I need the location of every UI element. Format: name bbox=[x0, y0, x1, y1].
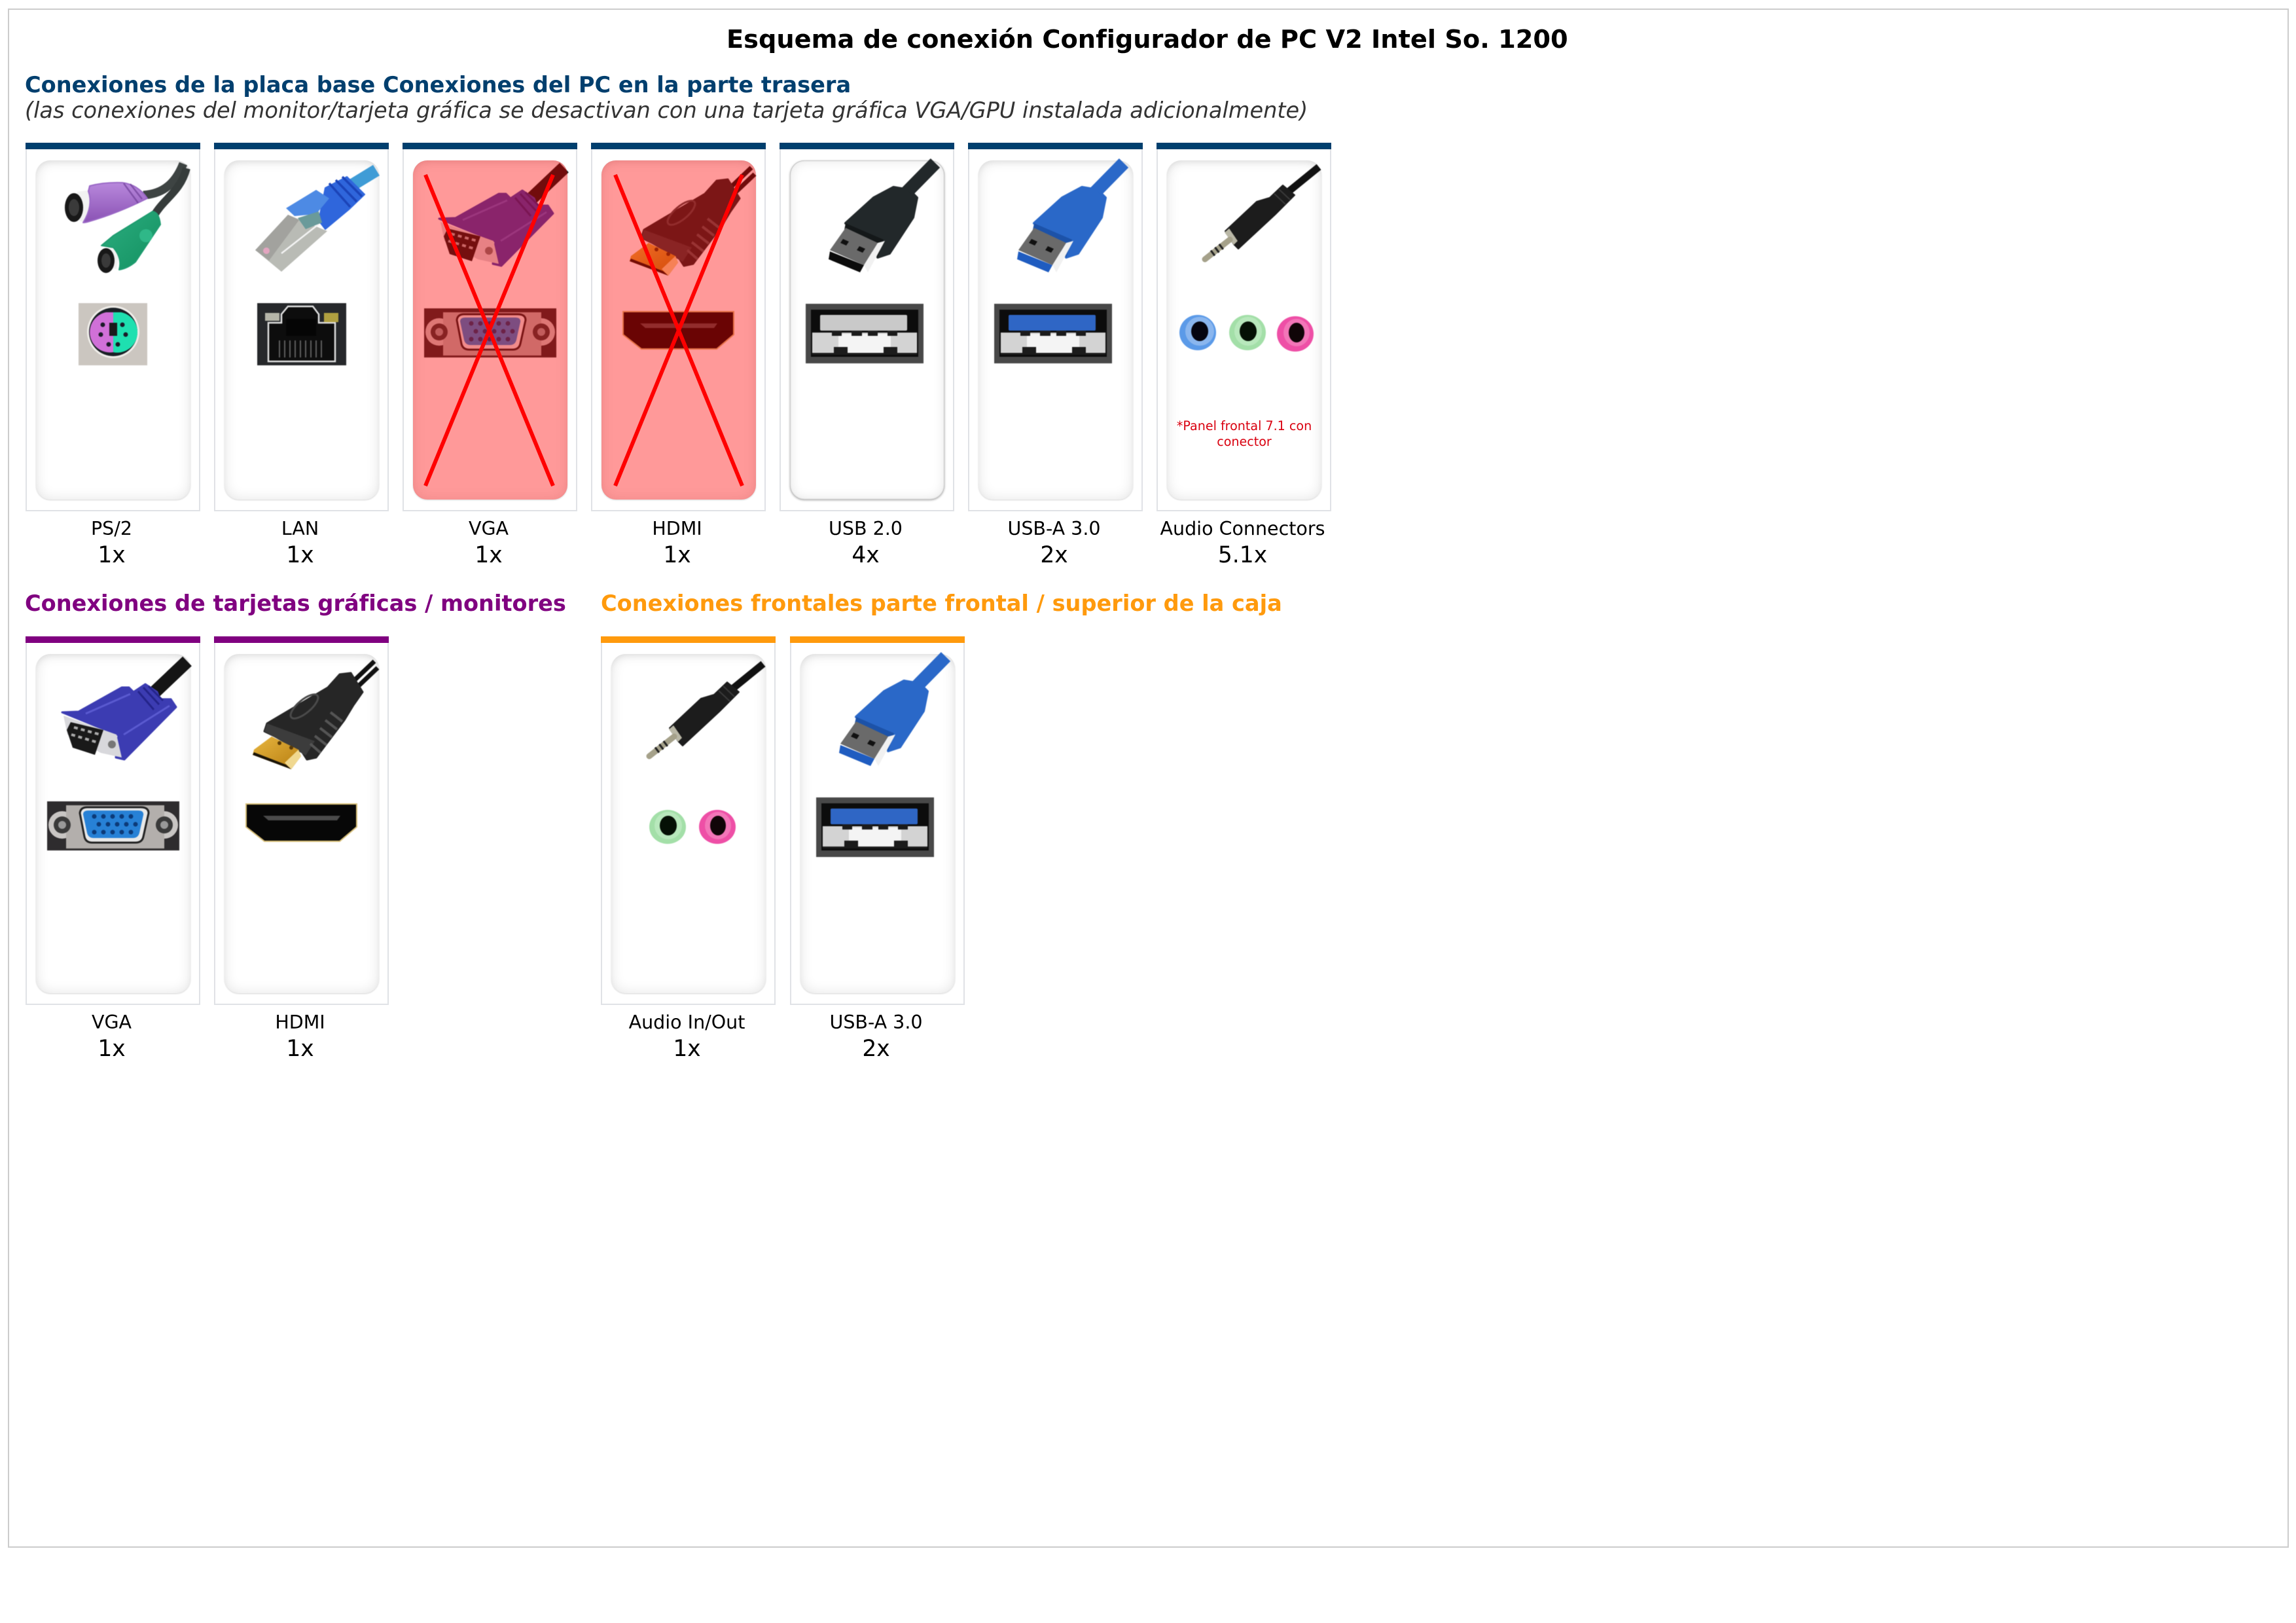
panel: GPU HDMI: HDMI bbox=[275, 1012, 325, 1033]
note text: *Panel frontal 7.1 con bbox=[1177, 418, 1312, 433]
panel: USB 2.0: USB 2.0 bbox=[829, 518, 903, 539]
panel: PS/2: PS/2 bbox=[91, 518, 132, 539]
icon: HDMI plug bbox=[253, 661, 378, 769]
panel: GPU VGA bbox=[26, 636, 200, 1062]
panel: LAN: LAN bbox=[281, 518, 319, 539]
connector art: HDMI crossed out bbox=[601, 160, 757, 500]
connector art: USB-A 3.0 bbox=[994, 158, 1128, 364]
note text: conector bbox=[1217, 434, 1272, 449]
panel: GPU VGA: 1x bbox=[98, 1036, 126, 1062]
icon: red cross bbox=[425, 175, 553, 486]
icon: USB plug blue bbox=[839, 657, 946, 766]
icon: red cross bbox=[615, 175, 742, 486]
panel: Front USB-A 3.0: 2x bbox=[862, 1036, 890, 1062]
panel: LAN bbox=[214, 143, 389, 568]
connector art: USB 2.0 bbox=[805, 158, 941, 364]
panel: GPU VGA: VGA bbox=[92, 1012, 132, 1033]
panel: VGA (disabled): VGA bbox=[469, 518, 509, 539]
icon: PS/2 port bbox=[79, 303, 147, 365]
panel: USB-A 3.0 bbox=[968, 143, 1143, 568]
icon: USB 2.0 port bbox=[806, 304, 924, 363]
panel: VGA (disabled) bbox=[403, 143, 577, 568]
connector art: HDMI bbox=[245, 659, 380, 843]
panel: USB 2.0 bbox=[780, 143, 954, 568]
panel: HDMI (disabled): HDMI bbox=[652, 518, 702, 539]
panel: LAN: 1x bbox=[286, 542, 314, 568]
icon: RJ45 port bbox=[257, 303, 346, 365]
connector art: VGA crossed out bbox=[413, 160, 569, 500]
icon: audio ports bbox=[649, 810, 736, 844]
icon: audio jack plug bbox=[649, 664, 763, 756]
icon: audio ports bbox=[1179, 315, 1314, 352]
panel: Audio Connectors bbox=[1157, 143, 1331, 568]
panel: Audio In/Out: Audio In/Out bbox=[629, 1012, 745, 1033]
icon: HDMI port bbox=[623, 312, 734, 349]
heading: motherboard connections: Conexiones de la placa base Conexiones del PC en la parte trasera bbox=[25, 72, 851, 98]
panel: Audio In/Out bbox=[601, 636, 776, 1062]
icon: VGA plug bbox=[62, 661, 187, 759]
panel: Audio In/Out: 1x bbox=[673, 1036, 701, 1062]
connector art: LAN bbox=[255, 165, 380, 366]
title: Esquema de conexión Configurador de PC V2 Intel So. 1200 bbox=[726, 25, 1568, 54]
panel: USB 2.0: 4x bbox=[852, 542, 880, 568]
icon: USB plug black bbox=[829, 163, 935, 272]
icon: RJ45 plug bbox=[255, 170, 376, 272]
image tile: USB-A 3.0 bbox=[800, 654, 955, 993]
image tile: USB-A 3.0 bbox=[978, 160, 1133, 500]
icon: VGA plug bbox=[439, 168, 564, 266]
icon: HDMI plug bbox=[630, 168, 755, 276]
panel: USB-A 3.0: USB-A 3.0 bbox=[1007, 518, 1101, 539]
connector art: Audio bbox=[1177, 164, 1321, 449]
image tile: HDMI bbox=[224, 654, 379, 993]
subheading note: (las conexiones del monitor/tarjeta gráfica se desactivan con una tarjeta gráfica VGA/GPU instalada adicionalmente) bbox=[25, 98, 1308, 123]
icon: USB plug blue bbox=[1017, 163, 1124, 272]
image tile: USB 2.0 bbox=[790, 160, 944, 500]
icon: audio jack plug bbox=[1205, 167, 1319, 259]
red disabled overlay bbox=[413, 160, 567, 500]
image tile: VGA bbox=[413, 160, 567, 500]
connector art: VGA bbox=[46, 656, 192, 851]
image tile: PS/2 bbox=[36, 160, 190, 500]
panel: HDMI (disabled) bbox=[591, 143, 766, 568]
panel: PS/2 bbox=[26, 143, 200, 568]
icon: USB 3.0 port bbox=[994, 304, 1112, 363]
heading: graphics card connections: Conexiones de tarjetas gráficas / monitores bbox=[25, 591, 566, 616]
icon: HDMI port bbox=[246, 804, 357, 841]
icon: USB 3.0 port bbox=[816, 797, 934, 857]
note text bbox=[1177, 418, 1312, 449]
icon: VGA port bbox=[424, 308, 556, 357]
image tile: HDMI bbox=[601, 160, 756, 500]
connector art: USB-A 3.0 bbox=[816, 652, 951, 858]
panel: Front USB-A 3.0 bbox=[790, 636, 965, 1062]
image tile: Audio bbox=[1167, 160, 1321, 500]
panel: Audio Connectors: Audio Connectors bbox=[1160, 518, 1325, 539]
heading: front panel connections: Conexiones frontales parte frontal / superior de la caja bbox=[601, 591, 1282, 616]
icon: VGA port bbox=[47, 801, 179, 850]
panel: GPU HDMI bbox=[214, 636, 389, 1062]
panel: VGA (disabled): 1x bbox=[475, 542, 503, 568]
red disabled overlay bbox=[601, 160, 756, 500]
image tile: VGA bbox=[36, 654, 190, 993]
panel: Audio Connectors: 5.1x bbox=[1218, 542, 1267, 568]
panel: USB-A 3.0: 2x bbox=[1040, 542, 1068, 568]
connector art: PS/2 bbox=[64, 162, 191, 365]
connector art: Audio bbox=[645, 661, 766, 845]
image tile: LAN bbox=[224, 160, 379, 500]
panel: PS/2: 1x bbox=[98, 542, 126, 568]
icon: PS/2 plugs bbox=[65, 164, 187, 273]
panel: Front USB-A 3.0: USB-A 3.0 bbox=[829, 1012, 923, 1033]
panel: GPU HDMI: 1x bbox=[286, 1036, 314, 1062]
panel: HDMI (disabled): 1x bbox=[663, 542, 691, 568]
image tile: Audio bbox=[611, 654, 766, 993]
